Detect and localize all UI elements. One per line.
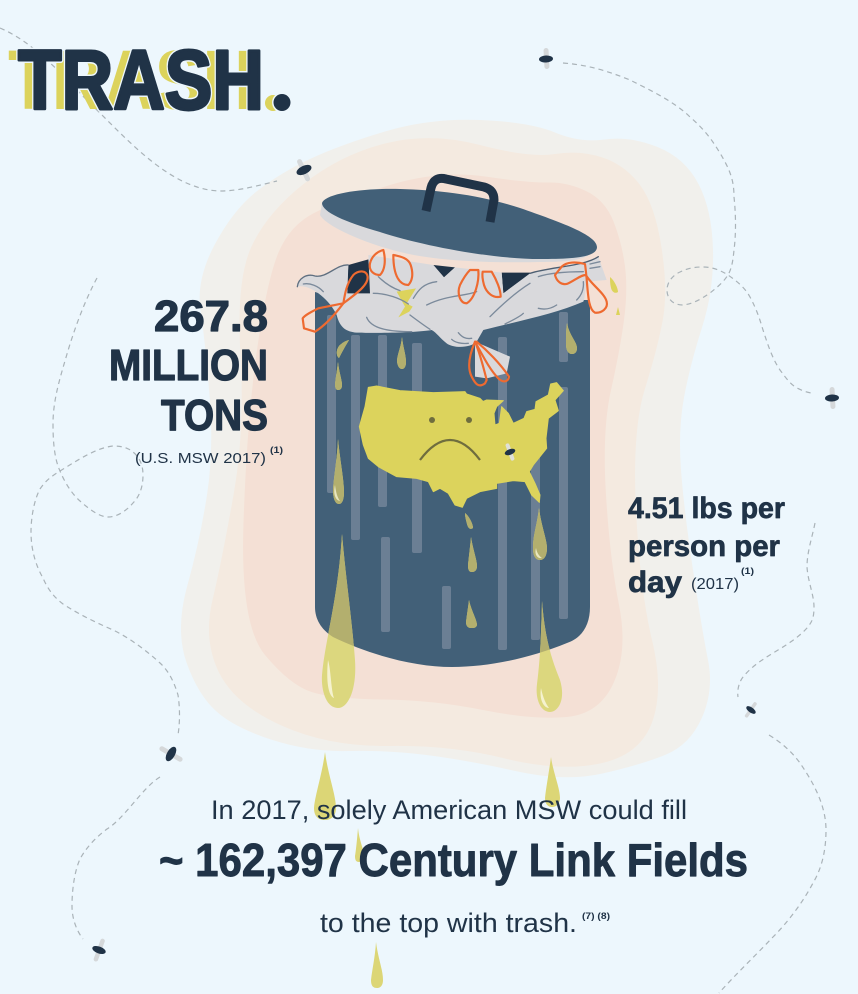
drips falling below the can <box>314 752 560 988</box>
frown <box>420 440 480 460</box>
stat: per person per day: person per <box>628 530 780 563</box>
fly bottom left <box>88 936 110 964</box>
can lid <box>320 178 597 262</box>
dashed fly trail: left loop <box>31 278 180 735</box>
title halo: TRASH <box>18 33 264 127</box>
title shadow: TRASH <box>8 33 254 127</box>
lid top <box>322 189 597 259</box>
stat: million tons <box>109 292 283 467</box>
US map shape <box>359 383 563 507</box>
fly near lid <box>292 156 316 184</box>
fly top centre <box>538 48 554 69</box>
trash can <box>297 178 620 712</box>
stat: per person per day: (1) <box>741 566 754 576</box>
bottom statement: to the top with trash. <box>320 908 577 938</box>
bottom statement: (7) (8) <box>582 911 610 921</box>
stat: million tons: MILLION <box>109 341 268 390</box>
stat: million tons: (1) <box>270 445 283 455</box>
bottom statement <box>159 795 748 938</box>
fly lower right <box>741 699 761 721</box>
right eye <box>466 417 472 423</box>
dark can opening <box>347 259 532 295</box>
left eye <box>429 417 435 423</box>
stain blobs behind the can <box>181 120 713 777</box>
dashed fly trail: right lower <box>719 735 826 993</box>
dashed fly trail: top left <box>0 28 277 191</box>
title dot halo <box>272 92 292 112</box>
stat: million tons: 267.8 <box>154 292 268 341</box>
stat: million tons: TONS <box>161 391 268 440</box>
dashed fly trail: top right loop <box>563 63 813 393</box>
dashed fly trail: lower left <box>72 777 160 939</box>
US map with sad face <box>359 383 563 507</box>
garbage bag <box>297 255 607 378</box>
orange bag ties <box>303 250 607 385</box>
stat: per person per day <box>628 492 785 599</box>
title shadow dot <box>265 95 281 111</box>
fly lower left <box>156 741 186 767</box>
title main word: TRASH <box>18 33 264 127</box>
lid handle <box>426 178 494 222</box>
fly on map <box>502 442 518 462</box>
stat: million tons: (U.S. MSW 2017) <box>135 450 266 467</box>
dashed fly trail: right upper <box>738 523 815 697</box>
stat: per person per day: (2017) <box>691 576 739 593</box>
can ribs <box>327 312 568 650</box>
can body <box>315 292 590 667</box>
bottom statement: In 2017, solely American MSW could fill <box>211 795 687 825</box>
fly right <box>824 387 840 409</box>
title dot <box>274 94 290 111</box>
drips running down the can <box>322 277 620 712</box>
stat: per person per day: 4.51 lbs per <box>628 492 785 525</box>
stat: per person per day: day <box>628 566 682 599</box>
bottom statement: ~ 162,397 Century Link Fields <box>159 834 748 886</box>
title <box>8 33 292 127</box>
lid rim <box>320 203 597 262</box>
